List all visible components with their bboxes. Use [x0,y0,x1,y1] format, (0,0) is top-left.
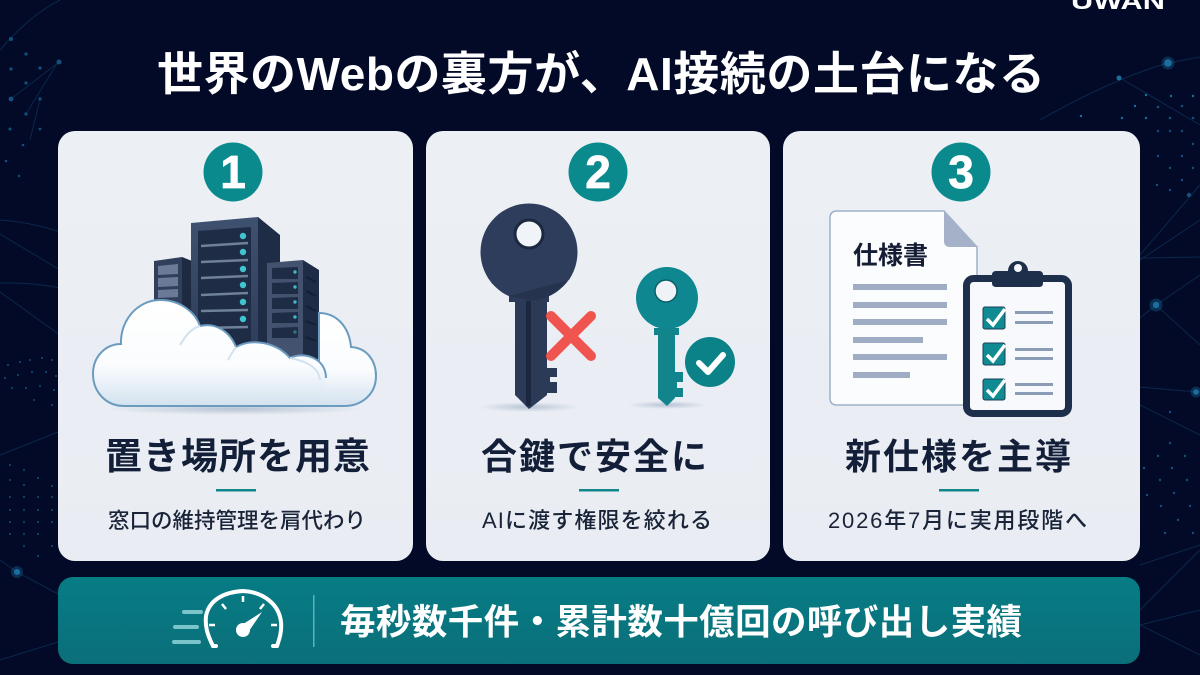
description: 窓口の維持管理を肩代わり [108,509,366,533]
banner text: 毎秒数千件・累計数十億回の呼び出し実績 [340,602,1022,642]
cloud back [290,313,376,406]
check badge [685,337,735,387]
icon: servers in cloud [93,217,376,415]
cloud outline [93,300,340,406]
icon: specification document: 仕様書 [853,242,928,270]
heading: 新仕様を主導 [845,436,1071,477]
red cross [551,316,591,356]
number badge 1: 1 [220,146,246,198]
number badge 2: 2 [585,146,611,198]
icon: speedometer [174,591,281,646]
description: AIに渡す権限を絞れる [482,508,712,533]
title: 世界のWebの裏方が、AI接続の土台になる [157,48,1045,100]
icon: specification document [830,211,978,405]
right server [267,260,319,365]
description: 2026年7月に実用段階へ [828,508,1087,533]
number badge 3: 3 [948,146,974,198]
panel: card 1 [58,131,413,561]
cloud front [93,300,326,406]
icon: clipboard checklist [966,261,1068,414]
number badge 3 [932,142,990,202]
number badge 1 [204,142,262,202]
heading: 合鍵で安全に [481,436,707,477]
heading: 置き場所を用意 [105,436,370,477]
number badge 2 [568,142,628,202]
left server [154,257,192,350]
panel: banner [58,577,1140,664]
panel: card 2 [426,131,770,561]
panel: card 3 [783,131,1140,561]
icon: small key with check [627,267,735,409]
centre server [191,217,280,360]
icon: large key crossed out [479,204,591,412]
